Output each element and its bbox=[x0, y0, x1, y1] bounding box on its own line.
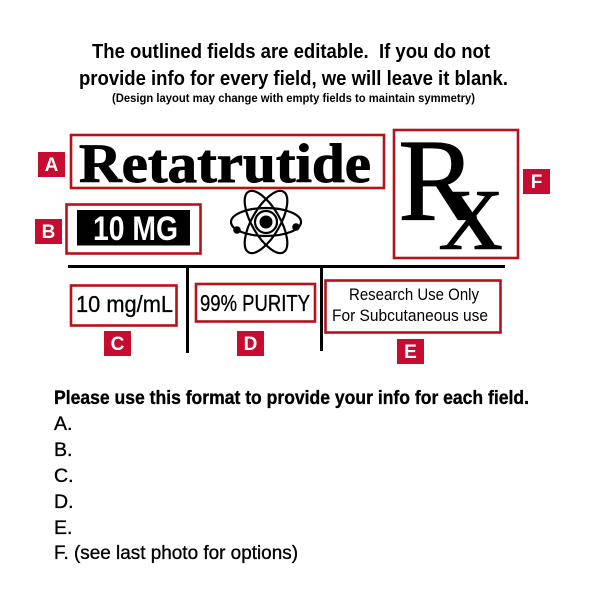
heading: intro: provide info for every field, we will leave it blank. bbox=[79, 68, 508, 90]
field E: usage notes: Research Use Only bbox=[349, 286, 480, 304]
label F: F bbox=[531, 172, 542, 193]
instructions text block: D. bbox=[54, 491, 74, 513]
label B bbox=[35, 219, 62, 244]
label C bbox=[104, 331, 131, 356]
field C: concentration bbox=[71, 286, 176, 326]
instructions text block: C. bbox=[54, 465, 74, 487]
label B: B bbox=[42, 222, 55, 243]
field C: concentration: 10 mg/mL bbox=[76, 291, 173, 317]
instructions text block: A. bbox=[54, 413, 72, 435]
field B: dosage: 10 MG bbox=[93, 210, 178, 248]
label E: E bbox=[404, 342, 417, 363]
label A bbox=[38, 152, 65, 177]
instructions text block: B. bbox=[54, 439, 72, 461]
label C: C bbox=[111, 334, 125, 355]
label A: A bbox=[45, 155, 59, 176]
instructions text block bbox=[54, 387, 529, 564]
instructions text block: E. bbox=[54, 517, 72, 539]
field F: Rx symbol: x bbox=[439, 139, 503, 276]
heading: intro: (Design layout may change with empty fields to maintain symmetry) bbox=[112, 91, 475, 105]
field B: dosage bbox=[66, 204, 200, 254]
label D bbox=[237, 331, 264, 356]
field E: usage notes: For Subcutaneous use bbox=[332, 307, 488, 325]
field F: Rx symbol bbox=[394, 115, 518, 276]
field D: purity bbox=[196, 284, 315, 322]
icon: atom bbox=[231, 185, 301, 259]
instructions text block: F. (see last photo for options) bbox=[54, 542, 298, 564]
heading: intro: The outlined fields are editable. If you do not bbox=[92, 41, 490, 63]
label F bbox=[523, 169, 550, 194]
label D: D bbox=[244, 334, 257, 355]
divider lines bbox=[68, 265, 505, 353]
field D: purity: 99% PURITY bbox=[200, 290, 310, 316]
field F: Rx symbol: R bbox=[398, 115, 477, 246]
instructions text block: Please use this format to provide your info for each field. bbox=[54, 387, 529, 409]
field A: product name: Retatrutide bbox=[79, 133, 371, 194]
field E: usage notes bbox=[326, 280, 500, 332]
label E bbox=[397, 339, 424, 364]
heading: intro bbox=[79, 41, 508, 105]
